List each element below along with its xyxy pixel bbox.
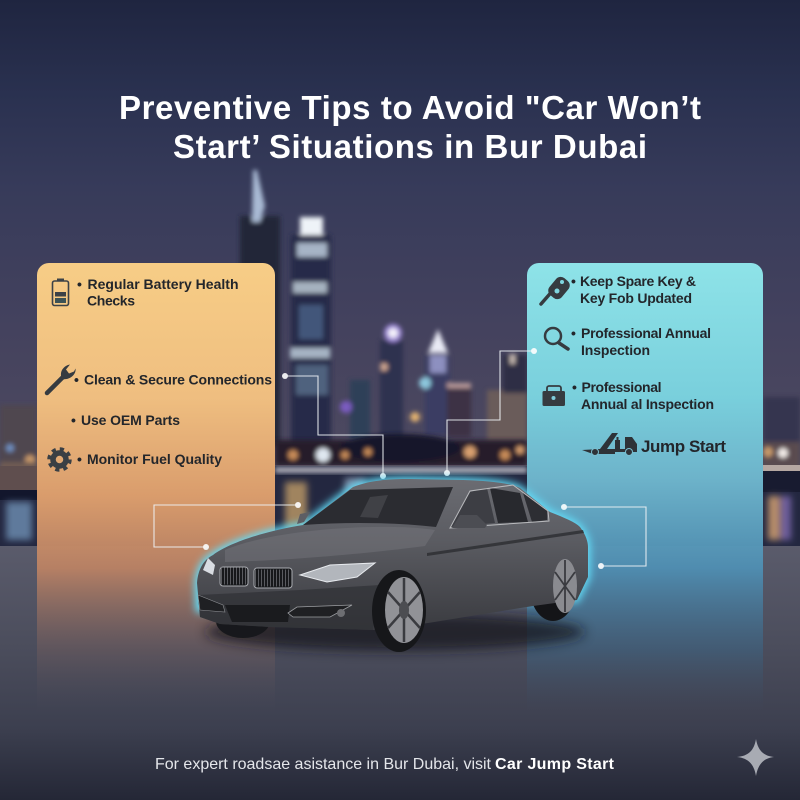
car: dark grey sedan with blue glow — [197, 479, 588, 652]
text: regular battery health checks: • — [77, 276, 82, 292]
background: blurred Dubai skyline — [240, 170, 527, 446]
panel: right blue tips — [527, 263, 763, 712]
text: keep spare key and key fob updated: Keep Spare Key & — [580, 273, 696, 289]
text: use OEM parts: Use OEM Parts — [81, 412, 180, 428]
title — [119, 89, 701, 165]
car lower intakes — [225, 605, 290, 622]
car mirrors — [452, 515, 487, 528]
car rear tyre underlay — [530, 555, 576, 621]
icon: wrench — [47, 364, 76, 393]
car body shading — [198, 585, 380, 630]
background: ground — [0, 546, 800, 800]
background: water with reflections — [0, 465, 800, 547]
text: keep spare key and key fob updated: • — [571, 273, 576, 289]
connector lines — [154, 348, 646, 569]
background: trees and shoreline lights — [275, 434, 527, 466]
car front tyre underlay — [216, 604, 270, 638]
title: Start’ Situations in Bur Dubai — [173, 128, 647, 165]
title: Preventive Tips to Avoid "Car Won’t — [119, 89, 701, 126]
text: professional annual inspection repeat: Professional — [582, 379, 662, 395]
text: professional annual inspection: Professional Annual — [581, 325, 711, 341]
text: regular battery health checks: Regular Battery Health — [88, 276, 238, 292]
panel: left orange tips — [37, 263, 275, 712]
car wheels — [372, 559, 577, 652]
icon: gear — [49, 449, 70, 470]
icon: toolbox — [542, 386, 565, 406]
text: clean and secure connections: Clean & Secure Connections — [84, 372, 272, 388]
text: professional annual inspection repeat: Annual al Inspection — [581, 396, 714, 412]
car glow — [197, 479, 588, 610]
text: monitor fuel quality: Monitor Fuel Quality — [87, 451, 222, 467]
text: professional annual inspection: • — [571, 325, 576, 341]
icon: magnifying glass — [545, 328, 568, 349]
text: professional annual inspection: Inspection — [581, 342, 650, 358]
icon: sparkle star — [737, 739, 774, 776]
car body — [197, 479, 588, 630]
text: monitor fuel quality: • — [77, 451, 82, 467]
text: use OEM parts: • — [71, 412, 76, 428]
icon: tow truck — [582, 433, 637, 456]
icon: battery — [52, 278, 68, 306]
car headlights — [300, 563, 375, 582]
car windows — [303, 485, 549, 528]
car shadow — [205, 613, 585, 651]
car grille — [220, 567, 292, 588]
footer text: For expert roadsae asistance in Bur Dubai, visit — [155, 756, 492, 773]
text: keep spare key and key fob updated: Key Fob Updated — [580, 290, 692, 306]
text: jump start: Jump Start — [641, 437, 726, 456]
footer text: Car Jump Start — [495, 756, 615, 773]
text: clean and secure connections: • — [74, 372, 79, 388]
text: professional annual inspection repeat: • — [572, 379, 577, 395]
background: side districts — [0, 397, 800, 472]
text: regular battery health checks: Checks — [87, 292, 135, 308]
background: night sky — [0, 0, 800, 470]
icon: key — [541, 274, 572, 304]
